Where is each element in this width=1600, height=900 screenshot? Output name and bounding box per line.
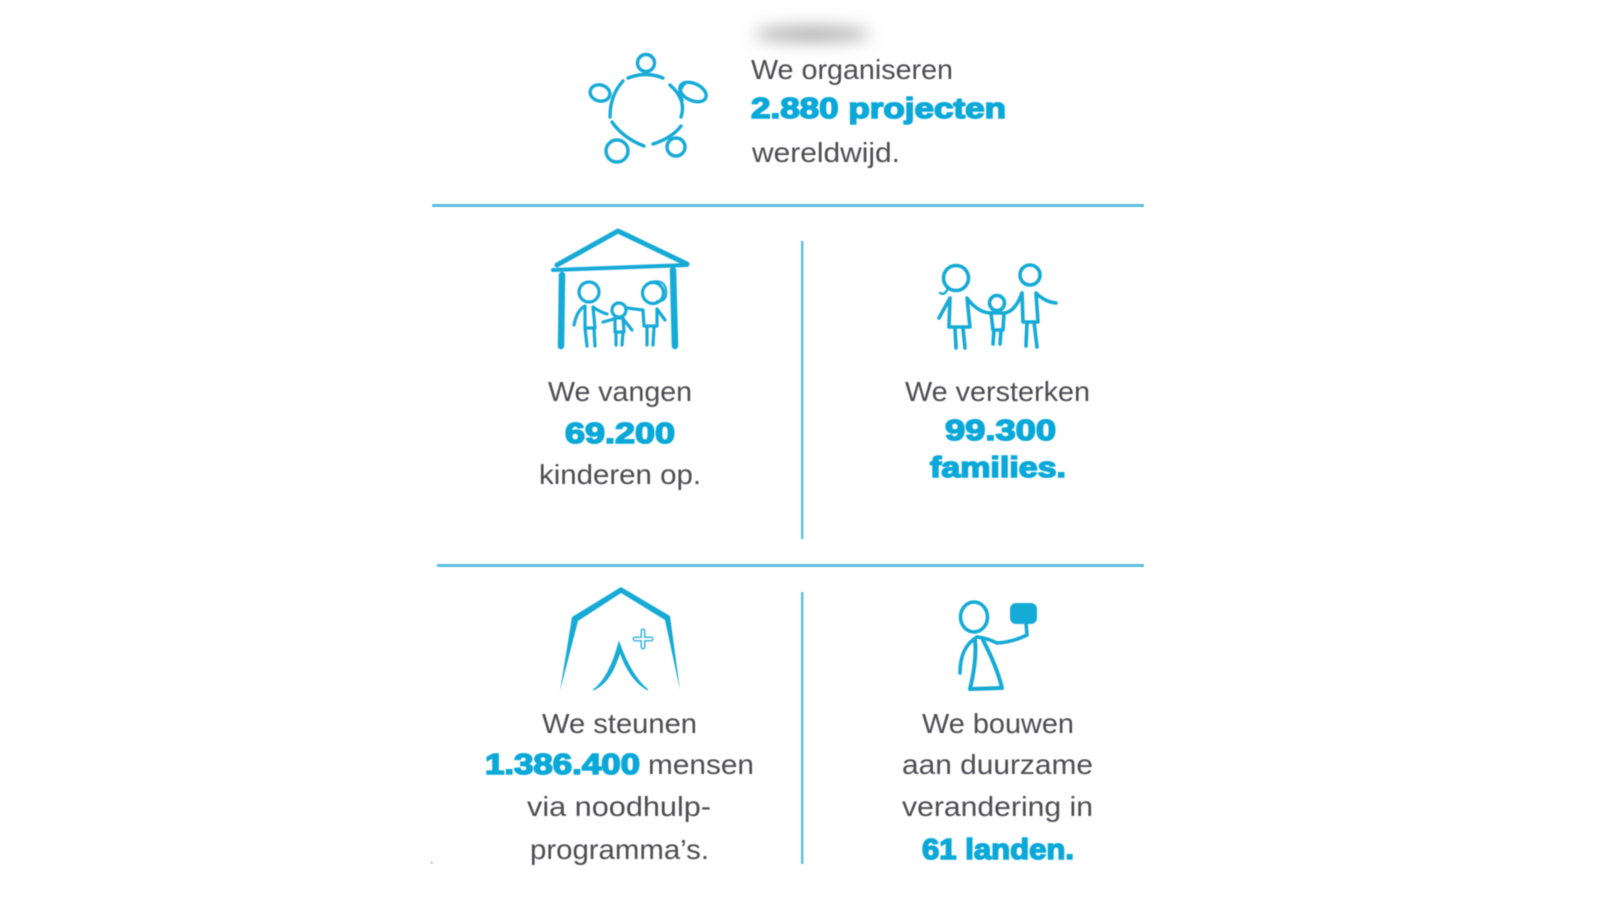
- text: projects: wereldwijd.: [751, 137, 900, 168]
- panel: projects: [588, 54, 1006, 168]
- text: projects: [751, 54, 1006, 168]
- text: children: We vangen: [548, 376, 692, 407]
- icon: circle of people: [588, 54, 709, 162]
- text: projects: 2.880 projecten: [751, 93, 1006, 125]
- icon: medical tent: [560, 587, 680, 691]
- blurred smudge at top: [754, 26, 870, 42]
- text: children: kinderen op.: [539, 459, 701, 490]
- panel: emergency aid: [485, 587, 754, 865]
- text: sustainable change: [902, 708, 1093, 866]
- text: emergency aid: We steunen: [542, 708, 697, 739]
- icon: house with family: [553, 231, 687, 346]
- text: children: 69.200: [565, 418, 675, 450]
- text: families: [905, 376, 1090, 484]
- text: families: We versterken: [905, 376, 1090, 407]
- text: emergency aid: mensen: [648, 749, 754, 780]
- icon: family holding hands: [939, 265, 1056, 348]
- text: sustainable change: aan duurzame: [902, 749, 1093, 780]
- text: emergency aid: via noodhulp-: [527, 791, 711, 822]
- text: children: [539, 376, 701, 490]
- text: families: families.: [930, 452, 1066, 484]
- panel: families: [905, 265, 1090, 484]
- panel: sustainable change: [902, 602, 1093, 866]
- text: families: 99.300: [945, 415, 1056, 447]
- infographic content: [420, 54, 1160, 885]
- text: sustainable change: verandering in: [902, 791, 1093, 822]
- text: emergency aid: [485, 708, 754, 865]
- text: sustainable change: 61 landen.: [922, 834, 1074, 866]
- icon: person with sign: [960, 602, 1037, 689]
- text: emergency aid: programma’s.: [530, 834, 709, 865]
- text: projects: We organiseren: [751, 54, 953, 85]
- text: sustainable change: We bouwen: [922, 708, 1074, 739]
- panel: children: [539, 231, 701, 490]
- text: emergency aid: 1.386.400: [485, 749, 640, 781]
